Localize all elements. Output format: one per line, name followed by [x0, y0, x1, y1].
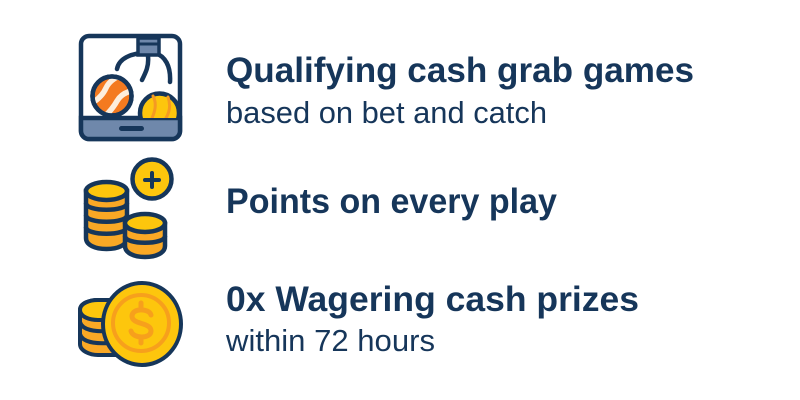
small stack	[80, 300, 115, 355]
claw	[117, 38, 170, 82]
heading: points: Points on every play	[226, 182, 558, 221]
large coin	[103, 283, 181, 365]
heading: wagering: 0x Wagering cash prizes	[226, 280, 639, 319]
tall stack	[86, 182, 127, 249]
yellow ball	[138, 91, 178, 118]
base slot	[120, 127, 143, 130]
subheading: bet and catch: based on bet and catch	[226, 95, 547, 130]
machine base	[81, 118, 180, 139]
icon: dollar coin with stack	[80, 283, 181, 365]
heading: qualifying: Qualifying cash grab games	[226, 51, 694, 90]
short stack	[125, 214, 165, 257]
subheading: 72 hours: within 72 hours	[225, 323, 435, 358]
icon: claw machine	[81, 36, 180, 139]
orange ball	[92, 74, 136, 118]
icon: coin stacks with plus	[86, 160, 172, 257]
plus coin	[132, 160, 172, 198]
